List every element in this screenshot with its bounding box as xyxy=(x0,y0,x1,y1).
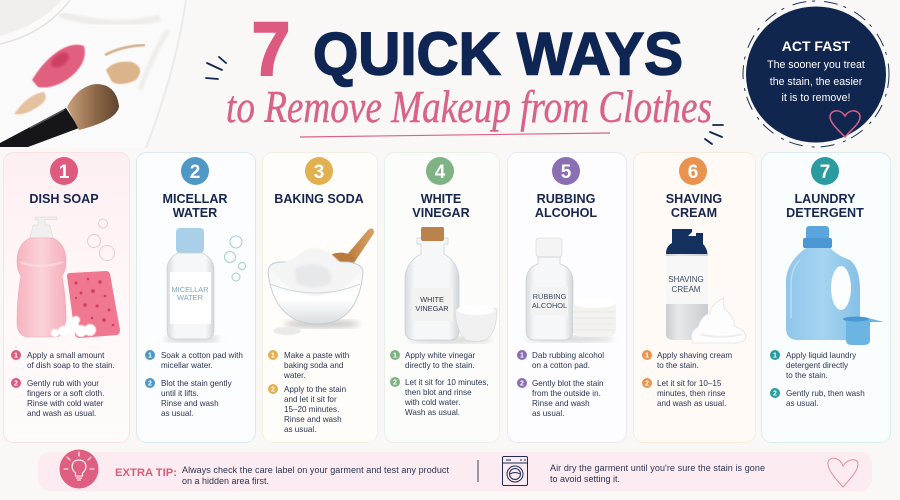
heading: baking soda: BAKING SODA xyxy=(274,192,364,206)
icon: micellar water bottle: WATER xyxy=(177,293,203,302)
icon: rubbing alcohol bottle: RUBBING xyxy=(533,292,567,301)
heading: dish soap: DISH SOAP xyxy=(29,192,99,206)
steps: 2 xyxy=(773,390,777,398)
badge 7 xyxy=(811,157,839,185)
subtitle: to Remove Makeup from Clothes: to Remove Makeup from Clothes xyxy=(226,81,712,132)
heading: micellar water: WATER xyxy=(173,206,217,220)
steps: 1 xyxy=(645,352,649,360)
badge 5 xyxy=(552,157,580,185)
steps: and wash as usual. xyxy=(27,409,96,418)
steps: minutes, then rinse xyxy=(657,389,726,398)
steps: directly to the stain. xyxy=(405,361,475,370)
divider xyxy=(478,460,479,482)
panel: rubbing alcohol xyxy=(508,152,626,442)
title: 7 Quick Ways: 7 xyxy=(252,7,290,91)
icon: rubbing alcohol bottle xyxy=(526,238,614,342)
icon: rubbing alcohol bottle: ALCOHOL xyxy=(532,301,567,310)
label: extra tip: EXTRA TIP: xyxy=(115,467,177,479)
steps xyxy=(390,350,489,417)
panel: shaving cream xyxy=(634,152,756,442)
steps: with cold water. xyxy=(404,398,460,407)
steps: Apply liquid laundry xyxy=(786,351,857,360)
callout: act fast: ACT FAST xyxy=(782,38,851,54)
steps: 1 xyxy=(148,352,152,360)
badge 4 xyxy=(426,157,454,185)
heading: laundry detergent: DETERGENT xyxy=(786,206,864,220)
icon: shaving foam xyxy=(691,298,746,343)
panel: white vinegar xyxy=(384,152,500,442)
text: extra tip body: Always check the care label on your garment and test any product xyxy=(182,465,449,475)
badge 6 xyxy=(679,157,707,185)
heading: laundry detergent: LAUNDRY xyxy=(794,192,856,206)
badge 3: 3 xyxy=(314,162,324,183)
title: 7 Quick Ways xyxy=(252,7,683,91)
steps: until it lifts. xyxy=(161,389,199,398)
icon: bubbles xyxy=(88,219,114,260)
icon: light bulb xyxy=(60,450,98,488)
icon: white cup xyxy=(455,305,497,342)
icon: micellar water bottle: MICELLAR xyxy=(172,285,208,294)
icon: vinegar bottle with cork: VINEGAR xyxy=(415,304,449,313)
steps: 1 xyxy=(393,352,397,360)
steps: Gently blot the stain xyxy=(532,379,604,388)
steps: fingers or a soft cloth. xyxy=(27,389,104,398)
steps: and wash as usual. xyxy=(657,399,726,408)
steps: detergent directly xyxy=(786,361,849,370)
icon: bubbles xyxy=(224,236,246,281)
badge 7: 7 xyxy=(820,162,830,183)
icon: shaving cream can: CREAM xyxy=(672,285,701,294)
panel: baking soda xyxy=(262,152,378,442)
panel: micellar water xyxy=(136,152,256,442)
callout: act fast: the stain, the easier xyxy=(770,76,863,88)
steps: Soak a cotton pad with xyxy=(161,351,243,360)
panel: dish soap xyxy=(4,152,130,442)
heading: white vinegar: WHITE xyxy=(421,192,461,206)
icon: detergent bottle xyxy=(786,226,860,340)
steps xyxy=(145,350,243,418)
steps: 1 xyxy=(14,352,18,360)
steps: Apply to the stain xyxy=(284,385,346,394)
icon: right sparkle lines xyxy=(705,125,723,144)
steps: 15–20 minutes. xyxy=(284,405,339,414)
icon: bowl of baking soda with scoop xyxy=(268,229,374,335)
panel: laundry detergent xyxy=(762,152,890,442)
icon: washing machine xyxy=(502,456,528,486)
badge 6: 6 xyxy=(688,162,698,183)
icon: vinegar bottle with cork xyxy=(405,227,492,343)
steps: as usual. xyxy=(532,409,564,418)
steps: as usual. xyxy=(161,409,193,418)
steps: 1 xyxy=(271,352,275,360)
steps: 1 xyxy=(773,352,777,360)
steps: 2 xyxy=(520,380,524,388)
steps: Let it sit for 10 minutes, xyxy=(405,378,489,387)
steps: on a cotton pad. xyxy=(532,361,590,370)
steps: Wash as usual. xyxy=(405,408,460,417)
steps: water. xyxy=(283,371,306,380)
steps: Rinse and wash xyxy=(161,399,219,408)
heading: rubbing alcohol: RUBBING xyxy=(537,192,596,206)
badge 3 xyxy=(305,157,333,185)
steps: Gently rub with your xyxy=(27,379,99,388)
steps: Apply a small amount xyxy=(27,351,105,360)
heading: shaving cream: SHAVING xyxy=(666,192,722,206)
steps: Dab rubbing alcohol xyxy=(532,351,604,360)
callout: act fast: it is to remove! xyxy=(782,92,850,104)
steps: Rinse with cold water xyxy=(27,399,104,408)
text: extra tip body: on a hidden area first. xyxy=(182,476,269,486)
heading: white vinegar: VINEGAR xyxy=(412,206,470,220)
icon: shaving cream can xyxy=(666,229,708,340)
badge 1: 1 xyxy=(59,162,70,183)
text: air dry: to avoid setting it. xyxy=(550,474,620,484)
heading: shaving cream: CREAM xyxy=(671,206,717,220)
text: air dry: Air dry the garment until you're sure the stain is gone xyxy=(550,463,765,473)
icon: left sparkle lines xyxy=(206,57,226,79)
badge 1 xyxy=(50,157,78,185)
icon: micellar water bottle xyxy=(164,228,220,342)
steps: micellar water. xyxy=(161,361,213,370)
steps: and let it sit for xyxy=(284,395,337,404)
steps: 2 xyxy=(645,380,649,388)
icon: heart outline xyxy=(828,458,858,487)
steps: Blot the stain gently xyxy=(161,379,233,388)
steps xyxy=(268,350,349,434)
steps: Apply white vinegar xyxy=(405,351,475,360)
badge 2: 2 xyxy=(190,162,200,183)
badge 5: 5 xyxy=(561,162,572,183)
steps: to the stain. xyxy=(786,371,828,380)
steps xyxy=(642,350,732,408)
icon: foam xyxy=(51,316,96,337)
badge 2 xyxy=(181,157,209,185)
steps xyxy=(517,350,604,418)
steps: Rinse and wash xyxy=(532,399,590,408)
steps: Let it sit for 10–15 xyxy=(657,379,722,388)
steps: 2 xyxy=(271,386,275,394)
steps: 1 xyxy=(520,352,524,360)
icon: pink sponge xyxy=(67,271,120,338)
steps: to the stain. xyxy=(657,361,699,370)
heading: micellar water: MICELLAR xyxy=(162,192,228,206)
steps: 2 xyxy=(14,380,18,388)
callout: act fast xyxy=(743,1,889,147)
icon: measuring cup xyxy=(843,316,884,345)
steps: then blot and rinse xyxy=(405,388,472,397)
icon: vinegar bottle with cork: WHITE xyxy=(420,295,444,304)
steps: Make a paste with xyxy=(284,351,349,360)
steps: Rinse and wash xyxy=(284,415,342,424)
panel: extra tip banner xyxy=(38,450,872,491)
callout: act fast: The sooner you treat xyxy=(767,59,865,71)
steps xyxy=(770,350,865,408)
icon: shaving cream can: SHAVING xyxy=(668,275,704,284)
badge 4: 4 xyxy=(435,162,446,183)
steps: from the outside in. xyxy=(532,389,601,398)
steps: Apply shaving cream xyxy=(657,351,732,360)
icon: dish soap bottle xyxy=(17,217,66,337)
steps: 2 xyxy=(148,380,152,388)
steps: 2 xyxy=(393,380,397,386)
steps: of dish soap to the stain. xyxy=(27,361,115,370)
heading: rubbing alcohol: ALCOHOL xyxy=(535,206,597,220)
steps: as usual. xyxy=(284,425,316,434)
steps xyxy=(11,350,115,418)
title: 7 Quick Ways: QUICK WAYS xyxy=(313,20,683,88)
steps: as usual. xyxy=(786,399,818,408)
steps: baking soda and xyxy=(284,361,343,370)
icon: cotton pads xyxy=(573,298,616,337)
photo: stained white shirt with makeup brush xyxy=(0,0,188,150)
steps: Gently rub, then wash xyxy=(786,389,865,398)
